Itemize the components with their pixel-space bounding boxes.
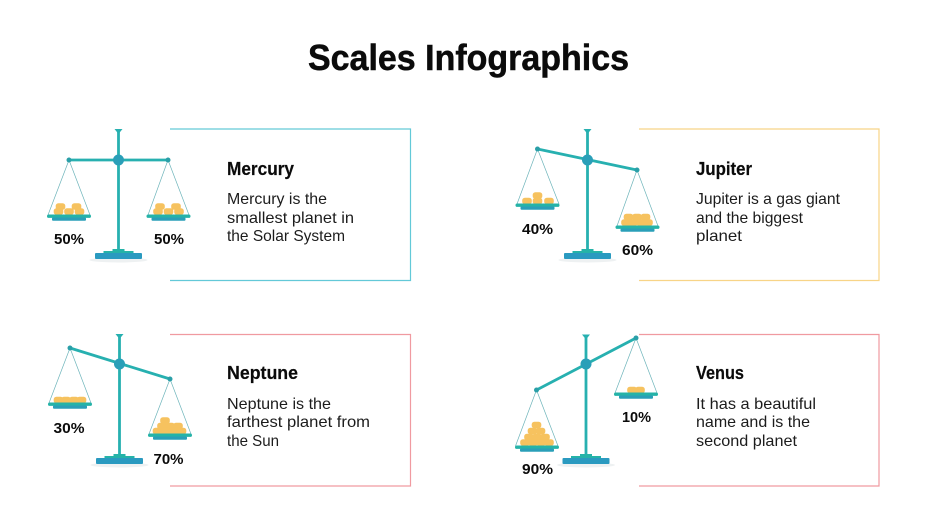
title: Scales Infographics <box>308 37 629 78</box>
text: Neptune description: farthest planet from <box>227 414 370 431</box>
card outline: Jupiter <box>639 129 879 280</box>
panel: Mercury <box>47 129 410 280</box>
icon: scale tilted 30/70 <box>48 334 192 468</box>
card outline: Mercury <box>170 129 410 280</box>
heading: Mercury: Mercury <box>227 159 294 179</box>
icon: scale tilted 40/60 <box>516 129 660 262</box>
label: 60%: 60% <box>622 243 653 259</box>
text: Mercury description: Mercury is the <box>227 191 327 208</box>
label: 50% right: 50% <box>154 232 184 248</box>
icon: balanced scale 50/50 <box>47 129 190 262</box>
card outline: Venus <box>639 334 879 486</box>
text: Venus description: It has a beautiful <box>696 396 816 413</box>
panel: Jupiter <box>516 129 879 280</box>
text: Neptune description: the Sun <box>227 433 279 450</box>
text: Venus description: name and is the <box>696 414 810 431</box>
text: Jupiter description: Jupiter is a gas giant <box>696 191 841 208</box>
heading: Venus: Venus <box>696 363 744 383</box>
text: Jupiter description <box>696 191 841 245</box>
icon: scale tilted 90/10 <box>515 334 658 468</box>
label: 30%: 30% <box>54 421 85 437</box>
label: 90%: 90% <box>522 462 553 478</box>
heading: Neptune: Neptune <box>227 363 298 383</box>
label: 10%: 10% <box>622 410 651 426</box>
label: 40%: 40% <box>522 222 553 238</box>
panel: Neptune <box>48 334 410 486</box>
text: Mercury description: the Solar System <box>227 228 345 245</box>
text: Neptune description <box>227 396 370 450</box>
text: Jupiter description: planet <box>696 228 743 245</box>
panel: Venus <box>515 334 879 486</box>
heading: Jupiter: Jupiter <box>696 159 752 179</box>
text: Mercury description: smallest planet in <box>227 210 354 227</box>
text: Neptune description: Neptune is the <box>227 396 331 413</box>
label: 70%: 70% <box>154 452 184 468</box>
text: Mercury description <box>227 191 354 245</box>
card outline: Neptune <box>170 334 410 486</box>
text: Venus description <box>696 396 816 450</box>
text: Venus description: second planet <box>696 433 798 450</box>
label: 50% left: 50% <box>54 232 84 248</box>
text: Jupiter description: and the biggest <box>696 210 804 227</box>
